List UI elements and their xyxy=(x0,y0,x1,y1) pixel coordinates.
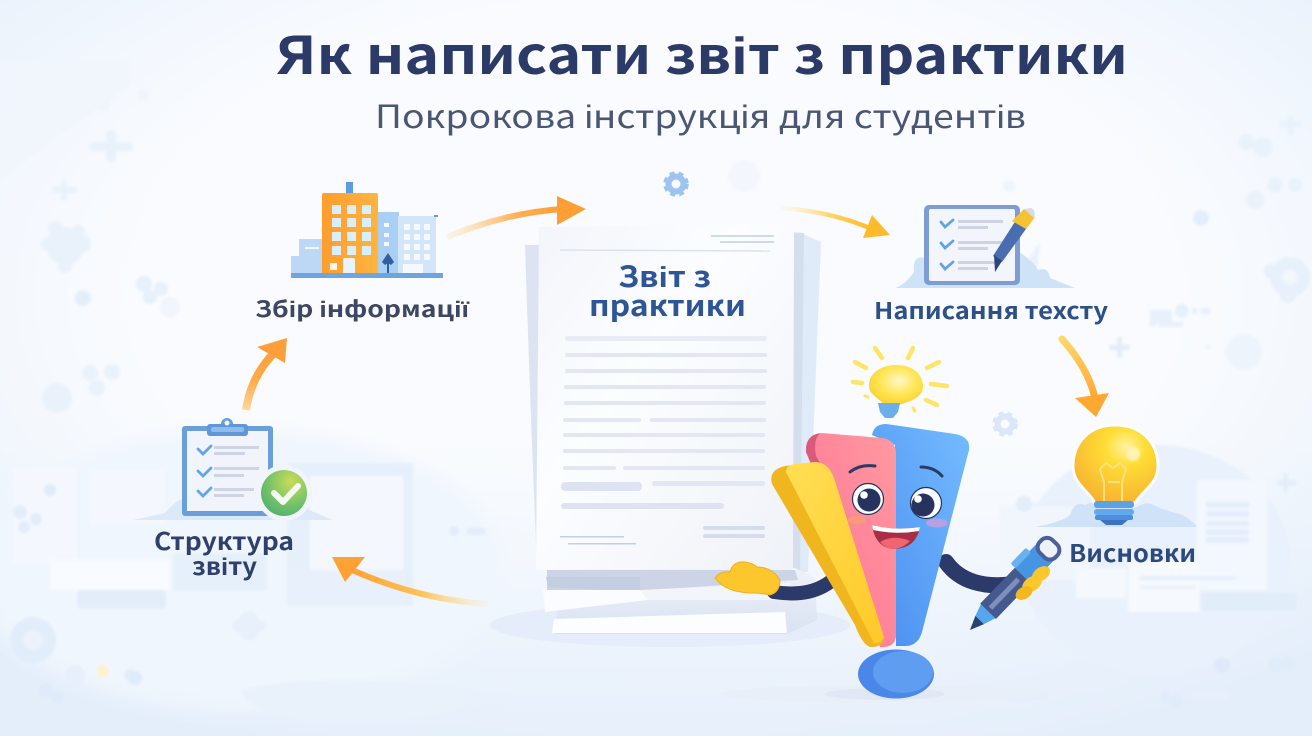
step: report structure xyxy=(133,418,333,582)
arrow: to structure xyxy=(332,557,488,604)
icon: small gear xyxy=(665,173,687,195)
label: report structure xyxy=(154,522,294,582)
left panel group xyxy=(0,430,505,725)
lower paper stack xyxy=(543,568,817,634)
pen held in right hand xyxy=(958,530,1063,638)
arrow: to document xyxy=(447,196,586,237)
top-right marks xyxy=(1003,115,1310,370)
icon: green check badge xyxy=(256,465,312,521)
blue panel xyxy=(872,424,969,646)
header rules xyxy=(560,236,774,251)
yellow panel xyxy=(771,462,884,647)
step: writing the text xyxy=(874,205,1108,326)
step: conclusions xyxy=(1035,425,1197,569)
label: writing the text: Написання техсту xyxy=(874,292,1108,326)
right hand xyxy=(1013,563,1053,603)
label: conclusions: Висновки xyxy=(1069,534,1196,569)
label: information gathering: Збір інформації xyxy=(255,292,470,324)
face xyxy=(848,466,948,549)
label: report structure: Структура xyxy=(154,522,294,557)
left arm xyxy=(774,577,836,593)
document title: Звіт з xyxy=(618,254,711,296)
icon: clipboard xyxy=(133,418,333,521)
body text lines xyxy=(560,336,767,544)
title: Як написати звіт з практики xyxy=(276,14,1128,89)
main sheet xyxy=(536,224,794,570)
icon: buildings xyxy=(291,182,443,278)
step: information gathering xyxy=(255,182,470,324)
left hand xyxy=(715,562,780,595)
ground shadow xyxy=(720,685,1050,703)
document title xyxy=(589,254,746,325)
dot of the exclamation mark xyxy=(858,650,934,698)
mascot: exclamation mark character xyxy=(715,348,1063,703)
icon: gear right xyxy=(994,413,1016,435)
icon: notebook with pen xyxy=(895,205,1075,288)
arrow: to information gathering xyxy=(246,338,287,410)
stack shadow ellipse xyxy=(490,603,850,647)
top-left marks xyxy=(0,60,180,413)
report document stack xyxy=(490,224,850,647)
pink panel xyxy=(806,433,896,647)
arrow: to writing xyxy=(780,208,890,238)
icon: big light bulb xyxy=(1035,425,1197,527)
subtitle: Покрокова інструкція для студентів xyxy=(375,92,1026,138)
document title: практики xyxy=(589,283,746,325)
label: report structure: звіту xyxy=(192,547,257,582)
small light bulb with rays xyxy=(853,348,947,418)
right arm xyxy=(946,562,1012,585)
arrow: to conclusions xyxy=(1062,339,1109,417)
icon: pen xyxy=(993,208,1035,272)
back sheets xyxy=(525,232,821,575)
right panel group xyxy=(990,445,1297,709)
